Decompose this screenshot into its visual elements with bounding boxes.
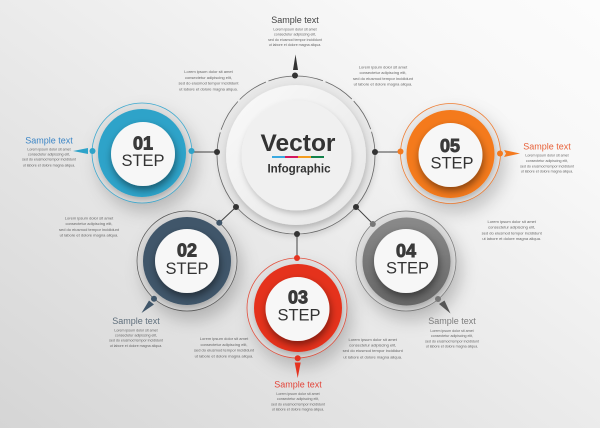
text block: lower right: Lorem ipsum dolor sit amet — [348, 337, 398, 342]
text block: upper left: sed do eiusmod tempor incididunt — [178, 81, 239, 86]
text block: middle left: Lorem ipsum dolor sit amet — [65, 215, 114, 220]
text block: top: Sample text — [271, 15, 319, 25]
text block: middle right: ut labore et dolore magna aliqua. — [482, 236, 541, 241]
step 3 — [247, 255, 347, 361]
text block: upper left: ut labore et dolore magna aliqua. — [179, 86, 238, 92]
text block: step 2: Lorem ipsum dolor sit amet — [114, 328, 158, 332]
heading: Vector: Vector — [261, 130, 336, 157]
ring — [137, 211, 237, 311]
text block: step 2 — [109, 316, 163, 348]
label: STEP — [277, 306, 321, 324]
text block: step 2: consectetur adipiscing elit, — [115, 333, 157, 337]
number: 05 — [440, 136, 460, 156]
nodes — [294, 255, 301, 361]
text block: middle right — [482, 219, 543, 241]
text block: lower right — [343, 337, 404, 360]
arrow: step 1 — [73, 148, 88, 154]
text block: lower left: Lorem ipsum dolor sit amet — [200, 336, 249, 341]
text block: step 3: ut labore et dolore magna aliqua. — [272, 408, 324, 412]
text block: step 3: Lorem ipsum dolor sit amet — [276, 392, 320, 396]
text block: lower left — [194, 336, 255, 358]
text block: top: ut labore et dolore magna aliqua. — [269, 43, 321, 47]
text block: step 4: sed do eiusmod tempor incididunt — [425, 340, 479, 344]
number: 02 — [177, 240, 197, 260]
text block: step 1: ut labore et dolore magna aliqua. — [23, 164, 75, 168]
text block: top: sed do eiusmod tempor incididunt — [268, 38, 322, 42]
text block: step 3: consectetur adipiscing elit, — [277, 397, 319, 401]
text block: step 4: consectetur adipiscing elit, — [431, 334, 473, 338]
arrow: top — [293, 54, 298, 70]
white disc — [418, 123, 482, 187]
arrow: step 3 — [295, 362, 301, 378]
label: STEP — [121, 152, 165, 170]
white disc — [374, 229, 438, 293]
number: 04 — [396, 241, 416, 261]
colour strip — [272, 156, 324, 158]
text block: step 5: consectetur adipiscing elit, — [526, 159, 568, 163]
text block: step 3 — [271, 380, 325, 412]
text block: lower right: ut labore et dolore magna aliqua. — [343, 354, 402, 360]
heading: Infographic: Infographic — [267, 162, 331, 176]
text block: step 5: Lorem ipsum dolor sit amet — [525, 154, 569, 158]
nodes — [370, 221, 441, 302]
text block: lower left: consectetur adipiscing elit, — [200, 342, 248, 347]
text block: middle right: Lorem ipsum dolor sit amet — [487, 219, 537, 224]
colour disc — [254, 264, 342, 352]
text block: step 3: Sample text — [274, 380, 322, 390]
text block: step 4 — [425, 316, 479, 348]
arrow: step 4 — [439, 300, 450, 314]
nodes — [151, 220, 222, 302]
text block: middle left: consectetur adipiscing elit, — [65, 221, 113, 226]
text block: step 1: Sample text — [25, 136, 73, 146]
text block: middle right: consectetur adipiscing elit, — [488, 224, 535, 230]
text block: lower left: ut labore et dolore magna aliqua. — [195, 354, 253, 358]
step 5 — [398, 104, 503, 204]
white disc — [266, 277, 330, 341]
text block: upper right: ut labore et dolore magna aliqua. — [354, 82, 412, 87]
inner disc — [242, 100, 352, 210]
text block: lower right: consectetur adipiscing elit, — [349, 342, 396, 348]
colour disc — [98, 109, 186, 197]
nodes — [90, 148, 194, 154]
text block: step 5: ut labore et dolore magna aliqua. — [521, 170, 573, 174]
text block: step 4: ut labore et dolore magna aliqua. — [426, 344, 478, 348]
text block: middle right: sed do eiusmod tempor incididunt — [482, 230, 543, 236]
text block: upper right — [353, 64, 414, 87]
ring — [92, 103, 192, 203]
colour disc — [143, 217, 231, 305]
text block: upper right: sed do eiusmod tempor incididunt — [353, 76, 414, 81]
number: 03 — [288, 288, 308, 308]
text block: step 2: Sample text — [112, 316, 160, 326]
text block: step 2: sed do eiusmod tempor incididunt — [109, 338, 163, 342]
text block: top: Lorem ipsum dolor sit amet — [273, 28, 317, 32]
text block: top — [268, 15, 322, 47]
text block: step 1: Lorem ipsum dolor sit amet — [27, 148, 71, 152]
text block: middle left: ut labore et dolore magna aliqua. — [60, 233, 118, 238]
text block: middle left: sed do eiusmod tempor incididunt — [59, 227, 120, 232]
white disc — [111, 122, 175, 186]
arrow: step 2 — [142, 300, 154, 313]
text block: step 4: Lorem ipsum dolor sit amet — [430, 329, 474, 333]
text block: step 5 — [520, 142, 574, 174]
label: STEP — [165, 260, 209, 278]
ring — [400, 104, 500, 204]
text block: step 1: sed do eiusmod tempor incididunt — [22, 158, 76, 162]
text block: upper left — [178, 69, 239, 92]
hub nodes — [214, 72, 378, 237]
text block: lower right: sed do eiusmod tempor incididunt — [343, 348, 404, 353]
text block: step 4: Sample text — [428, 316, 476, 326]
outer white disc — [226, 85, 366, 225]
text block: step 1 — [22, 136, 76, 168]
central hub — [214, 72, 378, 237]
step 1 — [90, 103, 194, 203]
text block: upper right: Lorem ipsum dolor sit amet — [359, 64, 408, 70]
nodes — [398, 148, 503, 156]
segmented outer ring — [217, 76, 375, 234]
text block: upper left: consectetur adipiscing elit, — [185, 75, 232, 80]
arrow: step 5 — [504, 150, 520, 157]
colour disc — [362, 218, 450, 306]
text block: step 1: consectetur adipiscing elit, — [28, 152, 70, 156]
text block: lower left: sed do eiusmod tempor incididunt — [194, 348, 255, 352]
colour disc — [406, 110, 494, 198]
white disc — [155, 229, 219, 293]
step 4 — [356, 211, 456, 311]
text block: top: consectetur adipiscing elit, — [274, 33, 316, 37]
connectors between hub and steps — [191, 152, 400, 258]
text block: step 2: ut labore et dolore magna aliqua. — [110, 344, 162, 348]
label: STEP — [430, 154, 474, 172]
text block: upper right: consectetur adipiscing elit, — [359, 70, 407, 75]
ring — [247, 258, 347, 358]
ring — [356, 211, 456, 311]
text block: step 3: sed do eiusmod tempor incididunt — [271, 402, 325, 406]
number: 01 — [133, 134, 153, 154]
step 2 — [137, 211, 237, 311]
text block: upper left: Lorem ipsum dolor sit amet — [184, 69, 234, 74]
text block: step 5: Sample text — [523, 142, 571, 152]
text block: middle left — [59, 215, 120, 238]
text block: step 5: sed do eiusmod tempor incididunt — [520, 164, 574, 168]
label: STEP — [386, 260, 429, 278]
